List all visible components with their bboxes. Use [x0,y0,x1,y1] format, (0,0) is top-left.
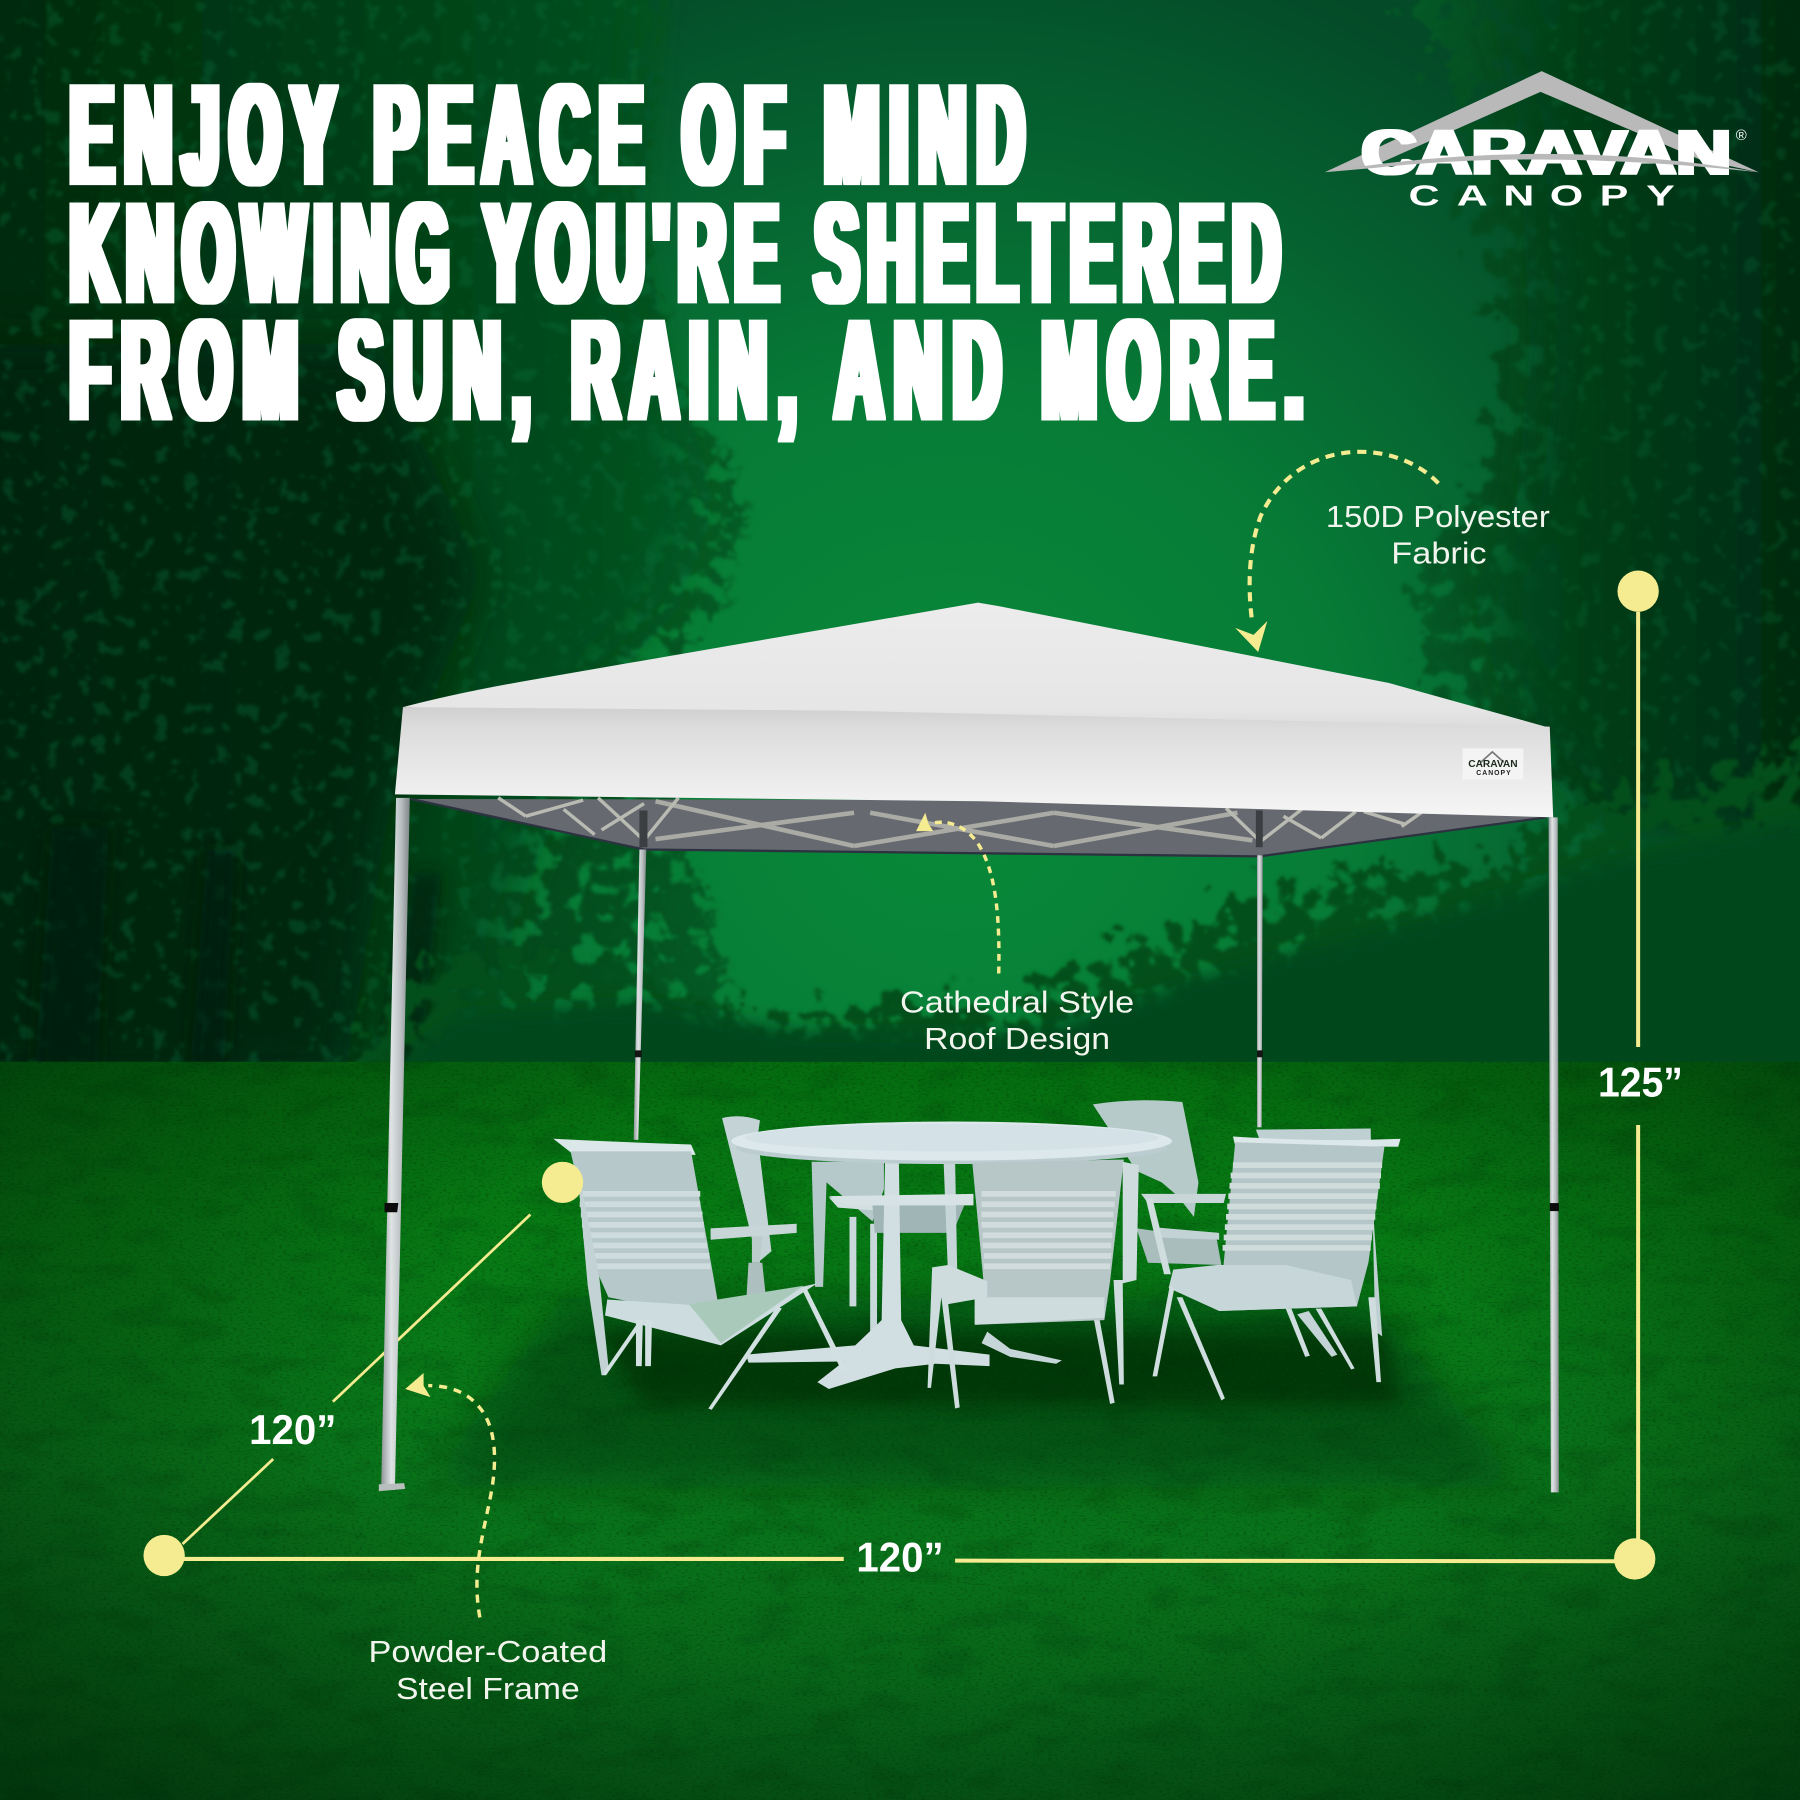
dimension: height 125 inches [1598,571,1683,1541]
chair: back right [1093,1100,1382,1357]
dimension: width 120 inches: 120” [856,1535,944,1581]
table [731,1122,1172,1389]
canopy valance [395,707,1553,817]
back pole collars [635,1050,1263,1057]
dimension: depth 120 inches: 120” [249,1407,336,1453]
callout: 150D Polyester Fabric [1235,452,1550,652]
callout: 150D Polyester Fabric: 150D Polyester [1326,499,1550,534]
chair: front centre [829,1159,1139,1409]
canopy label: CANOPY [1476,770,1511,777]
back right pole [1257,855,1263,1127]
logo: Caravan Canopy: CARAVAN [1361,116,1731,188]
chair: back left [722,1116,771,1306]
callout: Cathedral Style Roof Design: Cathedral Style [900,985,1134,1020]
canopy underside with truss [411,798,1546,856]
canopy label: CARAVAN [1468,759,1518,770]
chair: front left [553,1139,847,1410]
front left pole foot [379,1483,405,1491]
dimension line: depth 120 inches (behind frame) [183,1215,530,1544]
back left pole [634,849,646,1140]
callout: Powder-Coated Steel Frame: Steel Frame [396,1671,580,1706]
title: ENJOY PEACE OF MIND [70,56,1024,215]
callout: Cathedral Style Roof Design: Roof Design [924,1021,1110,1056]
left tree canopy [0,0,746,1079]
dimension: height 125 inches: 125” [1598,1059,1683,1105]
canopy label [1462,748,1523,779]
title: KNOWING YOU'RE SHELTERED [70,175,1280,333]
canopy roof slope [403,603,1550,728]
chair: under table [812,1162,973,1334]
front right pole [1549,817,1559,1492]
logo: Caravan Canopy: ® [1736,127,1747,144]
distant bushes [344,735,1800,1079]
front right pole collar [1550,1203,1559,1211]
title: FROM SUN, RAIN, AND MORE. [70,292,1303,450]
title [70,56,1303,450]
logo: Caravan Canopy: CANOPY [1409,180,1675,212]
callout: 150D Polyester Fabric: Fabric [1391,536,1487,571]
table and chairs [553,1100,1401,1410]
callout: Powder-Coated Steel Frame: Powder-Coated [368,1634,607,1669]
front left pole [381,798,410,1490]
lawn [0,1062,1800,1800]
front left pole collar [385,1203,398,1212]
dimension: width 120 inches [184,1535,1655,1581]
canopy tent [379,603,1559,1492]
chair: front right [1141,1136,1401,1401]
callout: Powder-Coated Steel Frame [368,1373,607,1706]
dimension: depth 120 inches [143,1162,583,1576]
right tree canopy [1366,0,1800,849]
callout: Cathedral Style Roof Design [900,813,1134,1056]
logo: Caravan Canopy [1325,71,1759,212]
